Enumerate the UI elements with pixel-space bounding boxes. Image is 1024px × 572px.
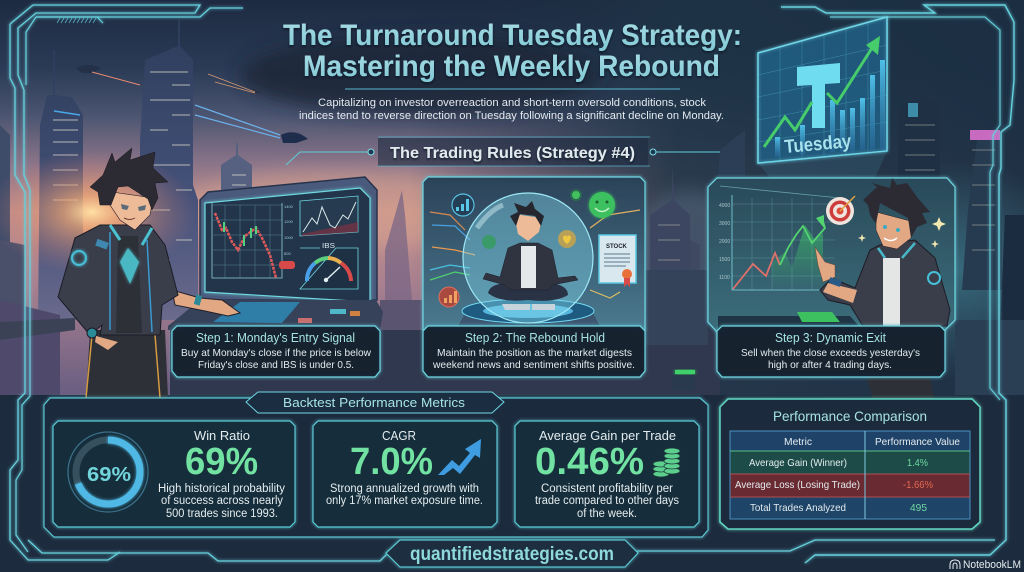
card: CAGR: CAGR	[382, 428, 416, 443]
website badge: quantifiedstrategies.com	[410, 544, 614, 565]
icon: red bars badge	[439, 287, 459, 307]
pointing arm	[172, 290, 240, 316]
callout: step 3	[717, 326, 945, 377]
callout: step 1: Friday's close and IBS is under 0.5.	[198, 359, 354, 371]
head	[110, 192, 153, 230]
callout: step 3: Step 3: Dynamic Exit	[775, 331, 887, 345]
comparison table: Performance Value	[875, 436, 960, 448]
icon: Tuesday billboard with rising chart	[758, 17, 887, 178]
website badge	[386, 540, 638, 567]
glass bubble	[463, 193, 593, 323]
console desk	[168, 300, 383, 330]
callout: step 2	[423, 326, 645, 377]
title	[283, 19, 742, 83]
right skyline towers	[650, 96, 1024, 330]
comparison table: Average Loss (Losing Trade)	[735, 479, 860, 491]
platform	[458, 299, 600, 326]
mini line chart	[300, 196, 358, 236]
panel: monitor with falling chart and IBS gauge	[200, 177, 377, 302]
meditating character	[483, 201, 578, 310]
panel: backtest performance metrics	[44, 392, 708, 537]
line chart	[719, 186, 840, 290]
callout: step 2: weekend news and sentiment shifts positive.	[432, 359, 635, 371]
ring gauge: 69%	[87, 464, 131, 486]
icon: coin stacks	[653, 448, 680, 477]
candlestick chart: 800	[284, 251, 291, 256]
IBS gauge	[300, 243, 358, 289]
big letter T	[797, 63, 840, 128]
card: win ratio: 500 trades since 1993.	[166, 508, 278, 520]
card: CAGR	[313, 421, 497, 527]
comparison table: Metric	[784, 436, 812, 448]
console	[718, 316, 862, 330]
callout: step 1: Buy at Monday's close if the price is below	[181, 347, 371, 359]
subtitle	[299, 97, 724, 122]
section heading: trading rules	[286, 137, 720, 166]
callout: step 3: high or after 4 trading days.	[768, 359, 892, 371]
IBS gauge: IBS	[322, 243, 335, 250]
comparison table: 1.4%	[907, 457, 928, 469]
panel: step 2 illustration	[423, 177, 645, 330]
metrics header	[246, 392, 504, 413]
legs of smiling hero	[867, 377, 934, 400]
card: CAGR: 7.0%	[350, 441, 433, 483]
frame hatch marks	[57, 18, 96, 23]
sun glare	[0, 150, 197, 274]
callout: step 1: Step 1: Monday's Entry Signal	[196, 331, 355, 345]
panel: performance comparison: Performance Comparison	[773, 408, 927, 424]
jacket	[58, 225, 178, 335]
title: The Turnaround Tuesday Strategy:	[283, 19, 742, 52]
line chart: 1100	[719, 275, 730, 281]
section heading: trading rules: The Trading Rules (Strategy #4)	[390, 145, 635, 162]
icon: certificate	[599, 235, 636, 287]
candlestick chart: 1200	[284, 219, 294, 224]
metrics header: Backtest Performance Metrics	[283, 395, 466, 410]
flying ships	[76, 65, 308, 143]
sparkles	[858, 217, 946, 248]
subtitle: Capitalizing on investor overreaction and short-term oversold conditions, stock	[318, 97, 706, 109]
panel: step 3 illustration	[708, 178, 955, 335]
icon: rising arrow	[438, 439, 481, 475]
legs	[86, 330, 168, 398]
card: average gain per trade: 0.46%	[535, 441, 644, 483]
card: average gain per trade: Consistent profitability per	[541, 483, 673, 495]
comparison table: -1.66%	[903, 479, 933, 491]
line chart: 2000	[719, 239, 730, 245]
comparison table	[730, 431, 970, 519]
callout: step 3: Sell when the close exceeds yesterday's	[741, 347, 920, 359]
candlestick chart: 1400	[284, 204, 294, 209]
NotebookLM watermark: NotebookLM	[963, 559, 1021, 571]
callout: step 1	[172, 326, 380, 377]
line chart: 4000	[719, 203, 730, 209]
green arrow	[764, 48, 872, 147]
line chart: 3000	[719, 221, 730, 227]
callout: step 2: Maintain the position as the market digests	[437, 347, 632, 359]
character: smiling hero	[815, 178, 950, 326]
title: Mastering the Weekly Rebound	[303, 50, 720, 83]
icon: Tuesday billboard with rising chart: Tuesday	[784, 131, 853, 158]
callout: step 2: Step 2: The Rebound Hold	[465, 331, 605, 345]
chart bars	[775, 60, 885, 157]
comparison table: Average Gain (Winner)	[749, 457, 847, 469]
line chart: 1500	[719, 257, 730, 263]
card: average gain per trade: trade compared to other days	[535, 495, 679, 507]
card: win ratio: 69%	[185, 441, 258, 483]
card: win ratio: of success across nearly	[161, 495, 283, 507]
candlestick chart: 1000	[284, 235, 294, 240]
icon: certificate: STOCK	[606, 244, 628, 250]
card: win ratio: High historical probability	[158, 483, 285, 495]
ring gauge	[68, 432, 148, 512]
card: win ratio	[53, 421, 295, 527]
eyes	[121, 204, 146, 211]
title divider	[345, 88, 680, 90]
balcony floor and railing	[0, 270, 1024, 572]
candlestick chart	[212, 203, 295, 278]
card: win ratio: Win Ratio	[194, 428, 250, 443]
card: CAGR: only 17% market exposure time.	[326, 495, 483, 507]
icon: target with arrow	[826, 196, 855, 225]
left skyline towers	[0, 20, 412, 320]
card: CAGR: Strong annualized growth with	[330, 483, 479, 495]
left wrist and hand	[87, 328, 97, 338]
card: average gain per trade: Average Gain per Trade	[539, 428, 676, 443]
card: average gain per trade	[515, 421, 699, 527]
comparison table: Total Trades Analyzed	[750, 502, 846, 514]
circuit lines	[430, 210, 640, 298]
card: average gain per trade: of the week.	[577, 508, 637, 520]
icon: smiley	[589, 192, 615, 218]
comparison table: 495	[910, 502, 927, 514]
panel: performance comparison	[720, 399, 980, 529]
icon: chart badge	[452, 194, 474, 216]
hair	[90, 148, 168, 210]
character: pointing hero	[58, 148, 240, 398]
subtitle: indices tend to reverse direction on Tuesday following a significant decline on Monday.	[299, 110, 724, 122]
